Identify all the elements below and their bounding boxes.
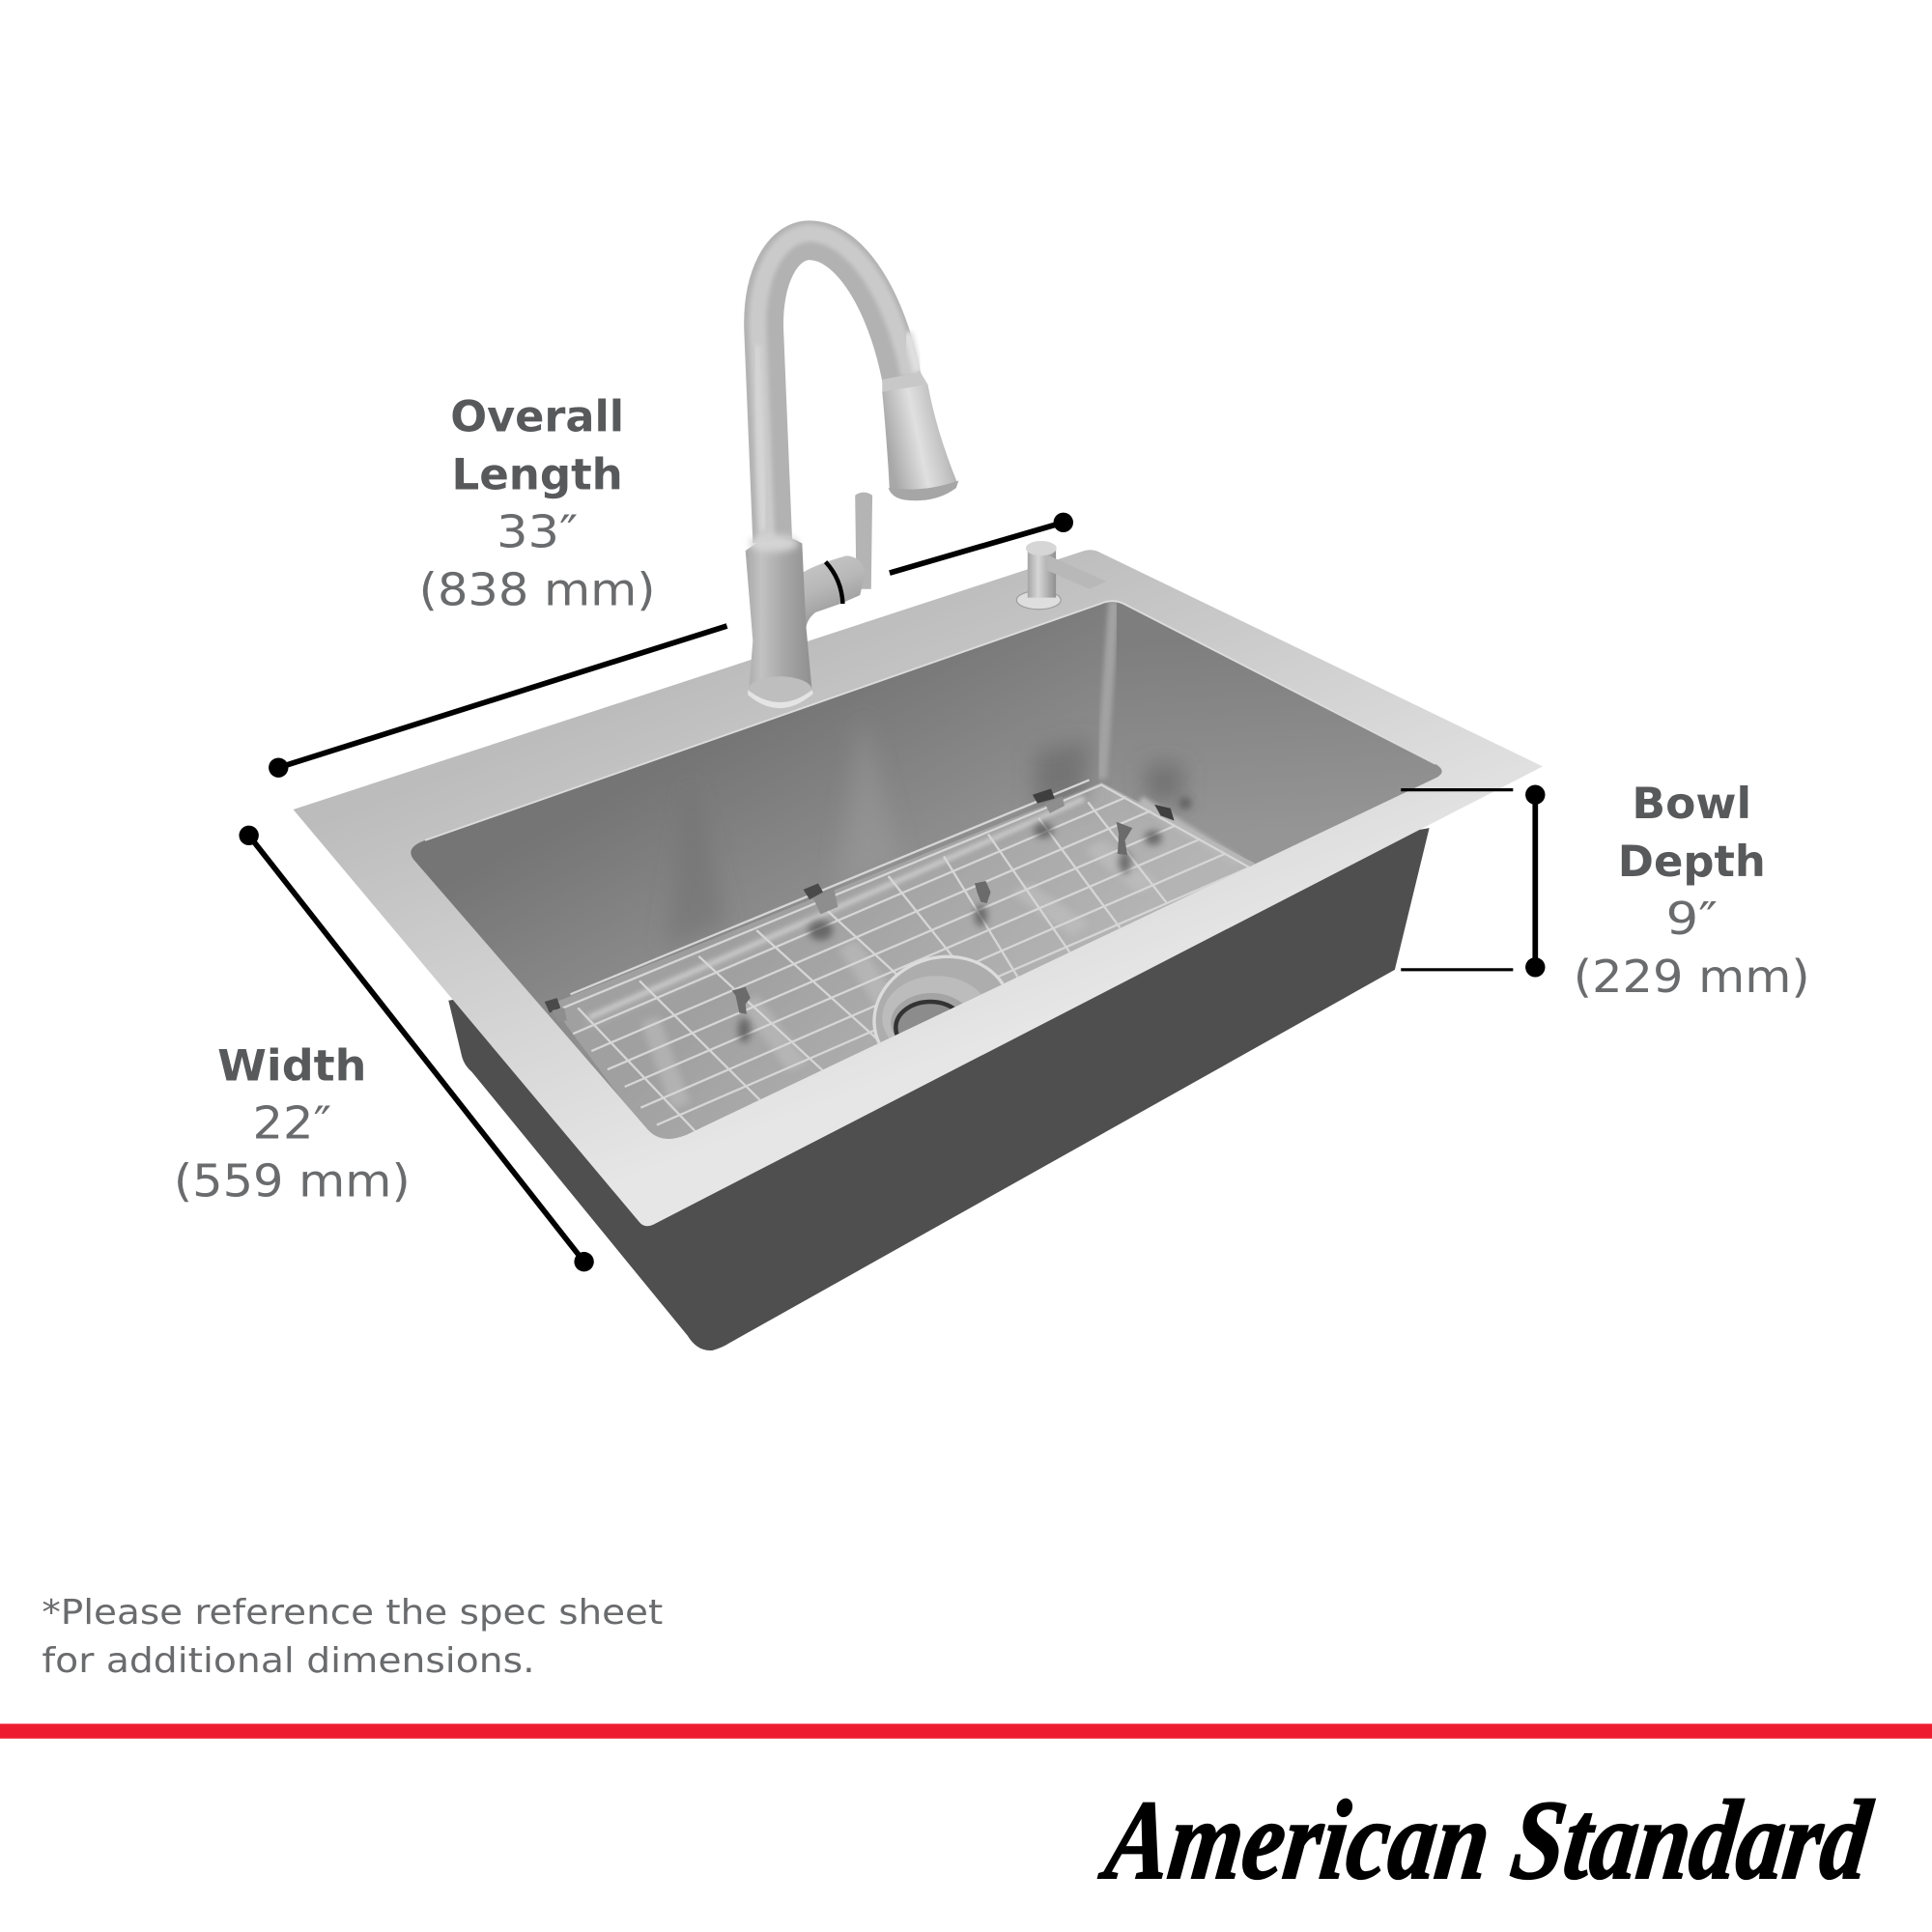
label: overall length — [419, 391, 656, 615]
base lip — [748, 690, 813, 708]
label: width: (559 mm) — [174, 1155, 411, 1208]
tiny brand mark in bowl: American Standard — [577, 719, 664, 757]
rear grid rail tube — [1064, 795, 1081, 805]
label: bowl depth — [1574, 779, 1810, 1003]
red divider bar — [0, 1723, 1932, 1739]
sink deck — [294, 550, 1543, 1226]
clip shadows — [738, 797, 1191, 1042]
label: overall length: Overall — [450, 391, 624, 441]
corner seam — [1101, 601, 1114, 779]
faucet collar — [750, 535, 799, 552]
footnote: for additional dimensions. — [42, 1641, 535, 1681]
footnote — [42, 1593, 663, 1681]
back wall — [394, 591, 1115, 1158]
handle lever — [855, 493, 872, 589]
drain strainer — [895, 1002, 965, 1054]
label: overall length: 33″ — [497, 505, 578, 557]
right rail tube — [1140, 801, 1238, 863]
dispenser cap — [1026, 541, 1057, 555]
drain collar — [891, 993, 972, 1052]
drain flange — [861, 942, 1025, 1092]
faucet — [746, 233, 958, 708]
bowl interior — [394, 591, 1454, 1158]
label: bowl depth: (229 mm) — [1574, 951, 1810, 1003]
dispenser base — [1016, 591, 1061, 610]
floor reflections — [640, 840, 1158, 1109]
handle black ring — [826, 562, 842, 604]
label: width: Width — [217, 1041, 366, 1092]
label: overall length: Length — [451, 449, 623, 499]
right wall — [1101, 591, 1454, 872]
dispenser nozzle — [1046, 554, 1106, 589]
handle hub — [802, 555, 865, 631]
dimension: overall length line — [269, 513, 1073, 778]
drain inner ring — [882, 976, 991, 1060]
bowl floor — [551, 782, 1282, 1158]
label: bowl depth: Depth — [1618, 837, 1766, 887]
grid clips — [545, 788, 1175, 1023]
sink exterior dark basin — [448, 828, 1430, 1350]
soap dispenser — [1016, 541, 1106, 610]
label: overall length: (838 mm) — [419, 563, 656, 615]
sink grid wires — [563, 780, 1249, 1133]
spray head collar — [882, 372, 927, 393]
label: width: 22″ — [252, 1097, 331, 1150]
gooseneck spout — [756, 233, 918, 542]
faucet base — [748, 676, 812, 703]
wall shading — [674, 739, 1189, 937]
bowl rim highlight — [425, 601, 1435, 840]
rail highlight — [589, 799, 1084, 1018]
spray head — [882, 384, 957, 492]
label: bowl depth: 9″ — [1665, 893, 1718, 945]
faucet body — [746, 537, 812, 701]
grid standoff legs — [732, 822, 1132, 1014]
dispenser column — [1028, 549, 1056, 598]
dimension: width line — [239, 826, 594, 1271]
label: bowl depth: Bowl — [1632, 779, 1751, 829]
footnote: *Please reference the spec sheet — [42, 1593, 663, 1633]
spray head rim — [889, 480, 958, 500]
label: width — [174, 1041, 411, 1208]
sink illustration — [294, 550, 1543, 1350]
dimension: bowl depth bracket — [1401, 784, 1545, 977]
